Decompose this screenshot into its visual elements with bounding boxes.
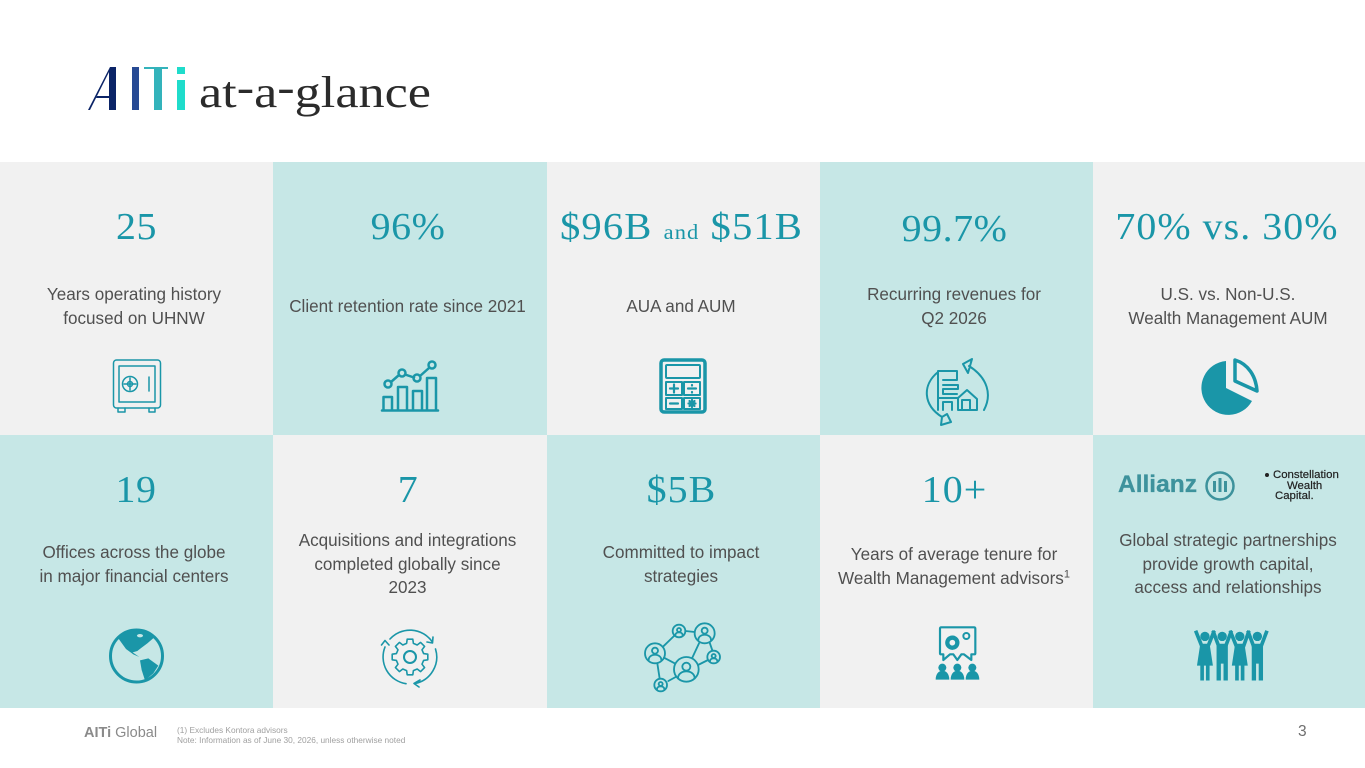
icon: growth chart xyxy=(380,360,440,412)
text: US vs Non-US xyxy=(1128,285,1328,328)
title: AITi at-a-glance: glance xyxy=(295,68,431,117)
panel: tenure xyxy=(820,435,1093,708)
text: offices: in major financial centers xyxy=(39,566,229,586)
footer logo: AITi Global: AITi Global xyxy=(84,725,157,741)
stat: 25: 25 xyxy=(116,206,157,248)
icon: network xyxy=(644,622,721,692)
stat: 70% vs. 30%: 70% vs. 30% xyxy=(1115,206,1339,248)
text: tenure: Wealth Management advisors1 xyxy=(838,568,1070,588)
panel: impact xyxy=(547,435,820,708)
icon: safe xyxy=(112,359,162,413)
panel: US vs Non-US xyxy=(1093,162,1365,435)
text: acquisitions: 2023 xyxy=(388,578,427,597)
panel: recurring revenues xyxy=(820,162,1093,435)
text: tenure: Years of average tenure for xyxy=(851,545,1057,564)
icon: gear cycle xyxy=(380,629,438,688)
footnote: Note: Information as of June 30, 2026, unless otherwise noted xyxy=(177,734,405,744)
stat: 7: 7 xyxy=(398,469,418,511)
stat: $96B and $51B: $96B and $51B xyxy=(560,206,803,248)
page number: 3 xyxy=(1298,723,1307,740)
logo: Constellation Wealth Capital: Constellation xyxy=(1273,469,1339,481)
stat: 10+: 10+ xyxy=(922,469,987,511)
logo: Constellation Wealth Capital xyxy=(1265,469,1339,502)
text: years operating history: focused on UHNW xyxy=(63,308,205,328)
footnote xyxy=(177,725,405,744)
panel: 25 years xyxy=(0,162,273,435)
icon: presentation team xyxy=(936,626,980,680)
icon: calculator xyxy=(659,358,707,414)
panel: acquisitions xyxy=(273,435,547,708)
text: offices: Offices across the globe xyxy=(42,543,226,562)
text: tenure xyxy=(838,545,1070,588)
title: AITi at-a-glance: - xyxy=(237,63,254,112)
text: acquisitions xyxy=(298,531,516,597)
stat: 99.7%: 99.7% xyxy=(902,208,1007,250)
text: partnerships: provide growth capital, xyxy=(1142,554,1314,574)
logo: Constellation Wealth Capital: Capital. xyxy=(1275,490,1314,502)
text: impact xyxy=(603,543,760,586)
text: partnerships xyxy=(1119,531,1337,597)
text: US vs Non-US: Wealth Management AUM xyxy=(1128,308,1328,328)
title: AITi at-a-glance xyxy=(88,63,431,117)
icon: globe xyxy=(109,628,164,684)
text: recurring revenues: Recurring revenues for xyxy=(867,285,1041,304)
text: impact: Committed to impact xyxy=(603,543,759,562)
icon: raised hands group xyxy=(1194,630,1269,680)
text: partnerships: access and relationships xyxy=(1134,578,1322,597)
icon: property cycle xyxy=(926,358,989,426)
text: US vs Non-US: U.S. vs. Non-U.S. xyxy=(1161,285,1295,304)
text: years operating history: Years operating history xyxy=(47,285,221,304)
stat: 96%: 96% xyxy=(371,206,445,248)
text: acquisitions: completed globally since xyxy=(314,554,501,574)
text: acquisitions: Acquisitions and integrations xyxy=(299,531,516,550)
panel: partnerships xyxy=(1093,435,1365,708)
logo: Constellation Wealth Capital: Wealth xyxy=(1287,480,1322,492)
panel: offices xyxy=(0,435,273,708)
stat: 19: 19 xyxy=(116,469,156,511)
text: recurring revenues xyxy=(867,285,1041,328)
text: AUA and AUM: AUA and AUM xyxy=(626,297,736,316)
logo: Allianz xyxy=(1118,471,1235,501)
stat: $5B: $5B xyxy=(647,469,716,511)
text: partnerships: Global strategic partnerships xyxy=(1119,531,1337,550)
text: recurring revenues: Q2 2026 xyxy=(921,308,987,328)
footnote: (1) Excludes Kontora advisors xyxy=(177,725,288,735)
title: AITi at-a-glance: at xyxy=(199,68,231,117)
text: client retention: Client retention rate since 2021 xyxy=(289,297,526,316)
text: offices xyxy=(39,543,229,586)
icon: pie chart xyxy=(1201,358,1259,415)
title: AITi at-a-glance: - xyxy=(277,63,295,112)
text: impact: strategies xyxy=(644,566,718,586)
text: years operating history xyxy=(47,285,221,328)
title: AITi at-a-glance: a xyxy=(254,68,277,117)
logo: Allianz: Allianz xyxy=(1118,471,1197,498)
panel: AUA and AUM xyxy=(547,162,820,435)
panel: 96% xyxy=(273,162,547,435)
